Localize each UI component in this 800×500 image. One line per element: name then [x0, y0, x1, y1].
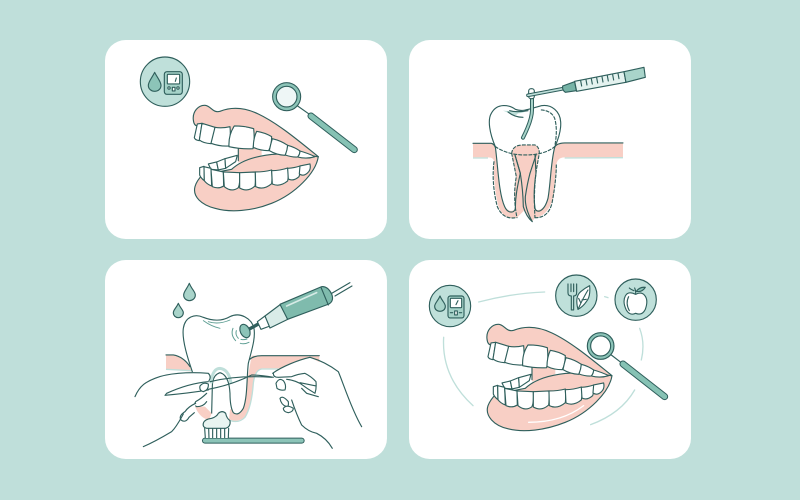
upper teeth [194, 123, 315, 158]
lower gum and lip [487, 373, 612, 431]
lower teeth [493, 374, 604, 409]
mouth illustration [487, 324, 612, 431]
connecting arcs [444, 292, 643, 425]
icon: fork and leaf [556, 275, 597, 316]
ultrasonic scaler [238, 283, 352, 339]
floss strand [208, 375, 273, 389]
endodontic file [523, 89, 534, 138]
panel: mouth check with glucose meter [105, 40, 387, 239]
icon: apple [615, 279, 656, 320]
upper teeth [488, 342, 609, 377]
lower gum and lip [195, 154, 318, 211]
mouth illustration [193, 105, 318, 211]
upper gum and lip [487, 324, 612, 376]
panel: whole-body oral health [409, 260, 691, 459]
crown fold highlight [503, 111, 526, 115]
toothbrush [203, 412, 302, 441]
panel: cleaning, flossing and brushing [105, 260, 387, 459]
icon: blood drop and glucose meter [140, 57, 190, 106]
pulp and canals [512, 145, 539, 222]
hand: left [135, 373, 210, 447]
icon: water drops [173, 283, 195, 318]
root dashed margins [493, 162, 556, 218]
central canal [520, 173, 532, 222]
dashed crown margin [495, 110, 556, 155]
tooth outline [489, 105, 561, 212]
upper gum and lip [193, 105, 318, 157]
tooth [183, 315, 254, 414]
throat [531, 366, 555, 382]
lower left gum [195, 407, 212, 420]
gum tissue [166, 355, 319, 421]
icon: dental mirror [273, 83, 354, 150]
vibration arcs [232, 328, 249, 344]
syringe [528, 67, 645, 95]
hand: right [273, 357, 362, 448]
throat [238, 147, 262, 163]
panel: root canal [409, 40, 691, 239]
root canal highlight [211, 368, 231, 383]
icon: blood drop and glucose meter [429, 285, 471, 327]
icon: dental mirror [587, 333, 665, 397]
lower teeth [200, 155, 310, 190]
crown fold [203, 320, 230, 328]
gum tissue [473, 143, 623, 218]
gum highlight [529, 406, 584, 422]
